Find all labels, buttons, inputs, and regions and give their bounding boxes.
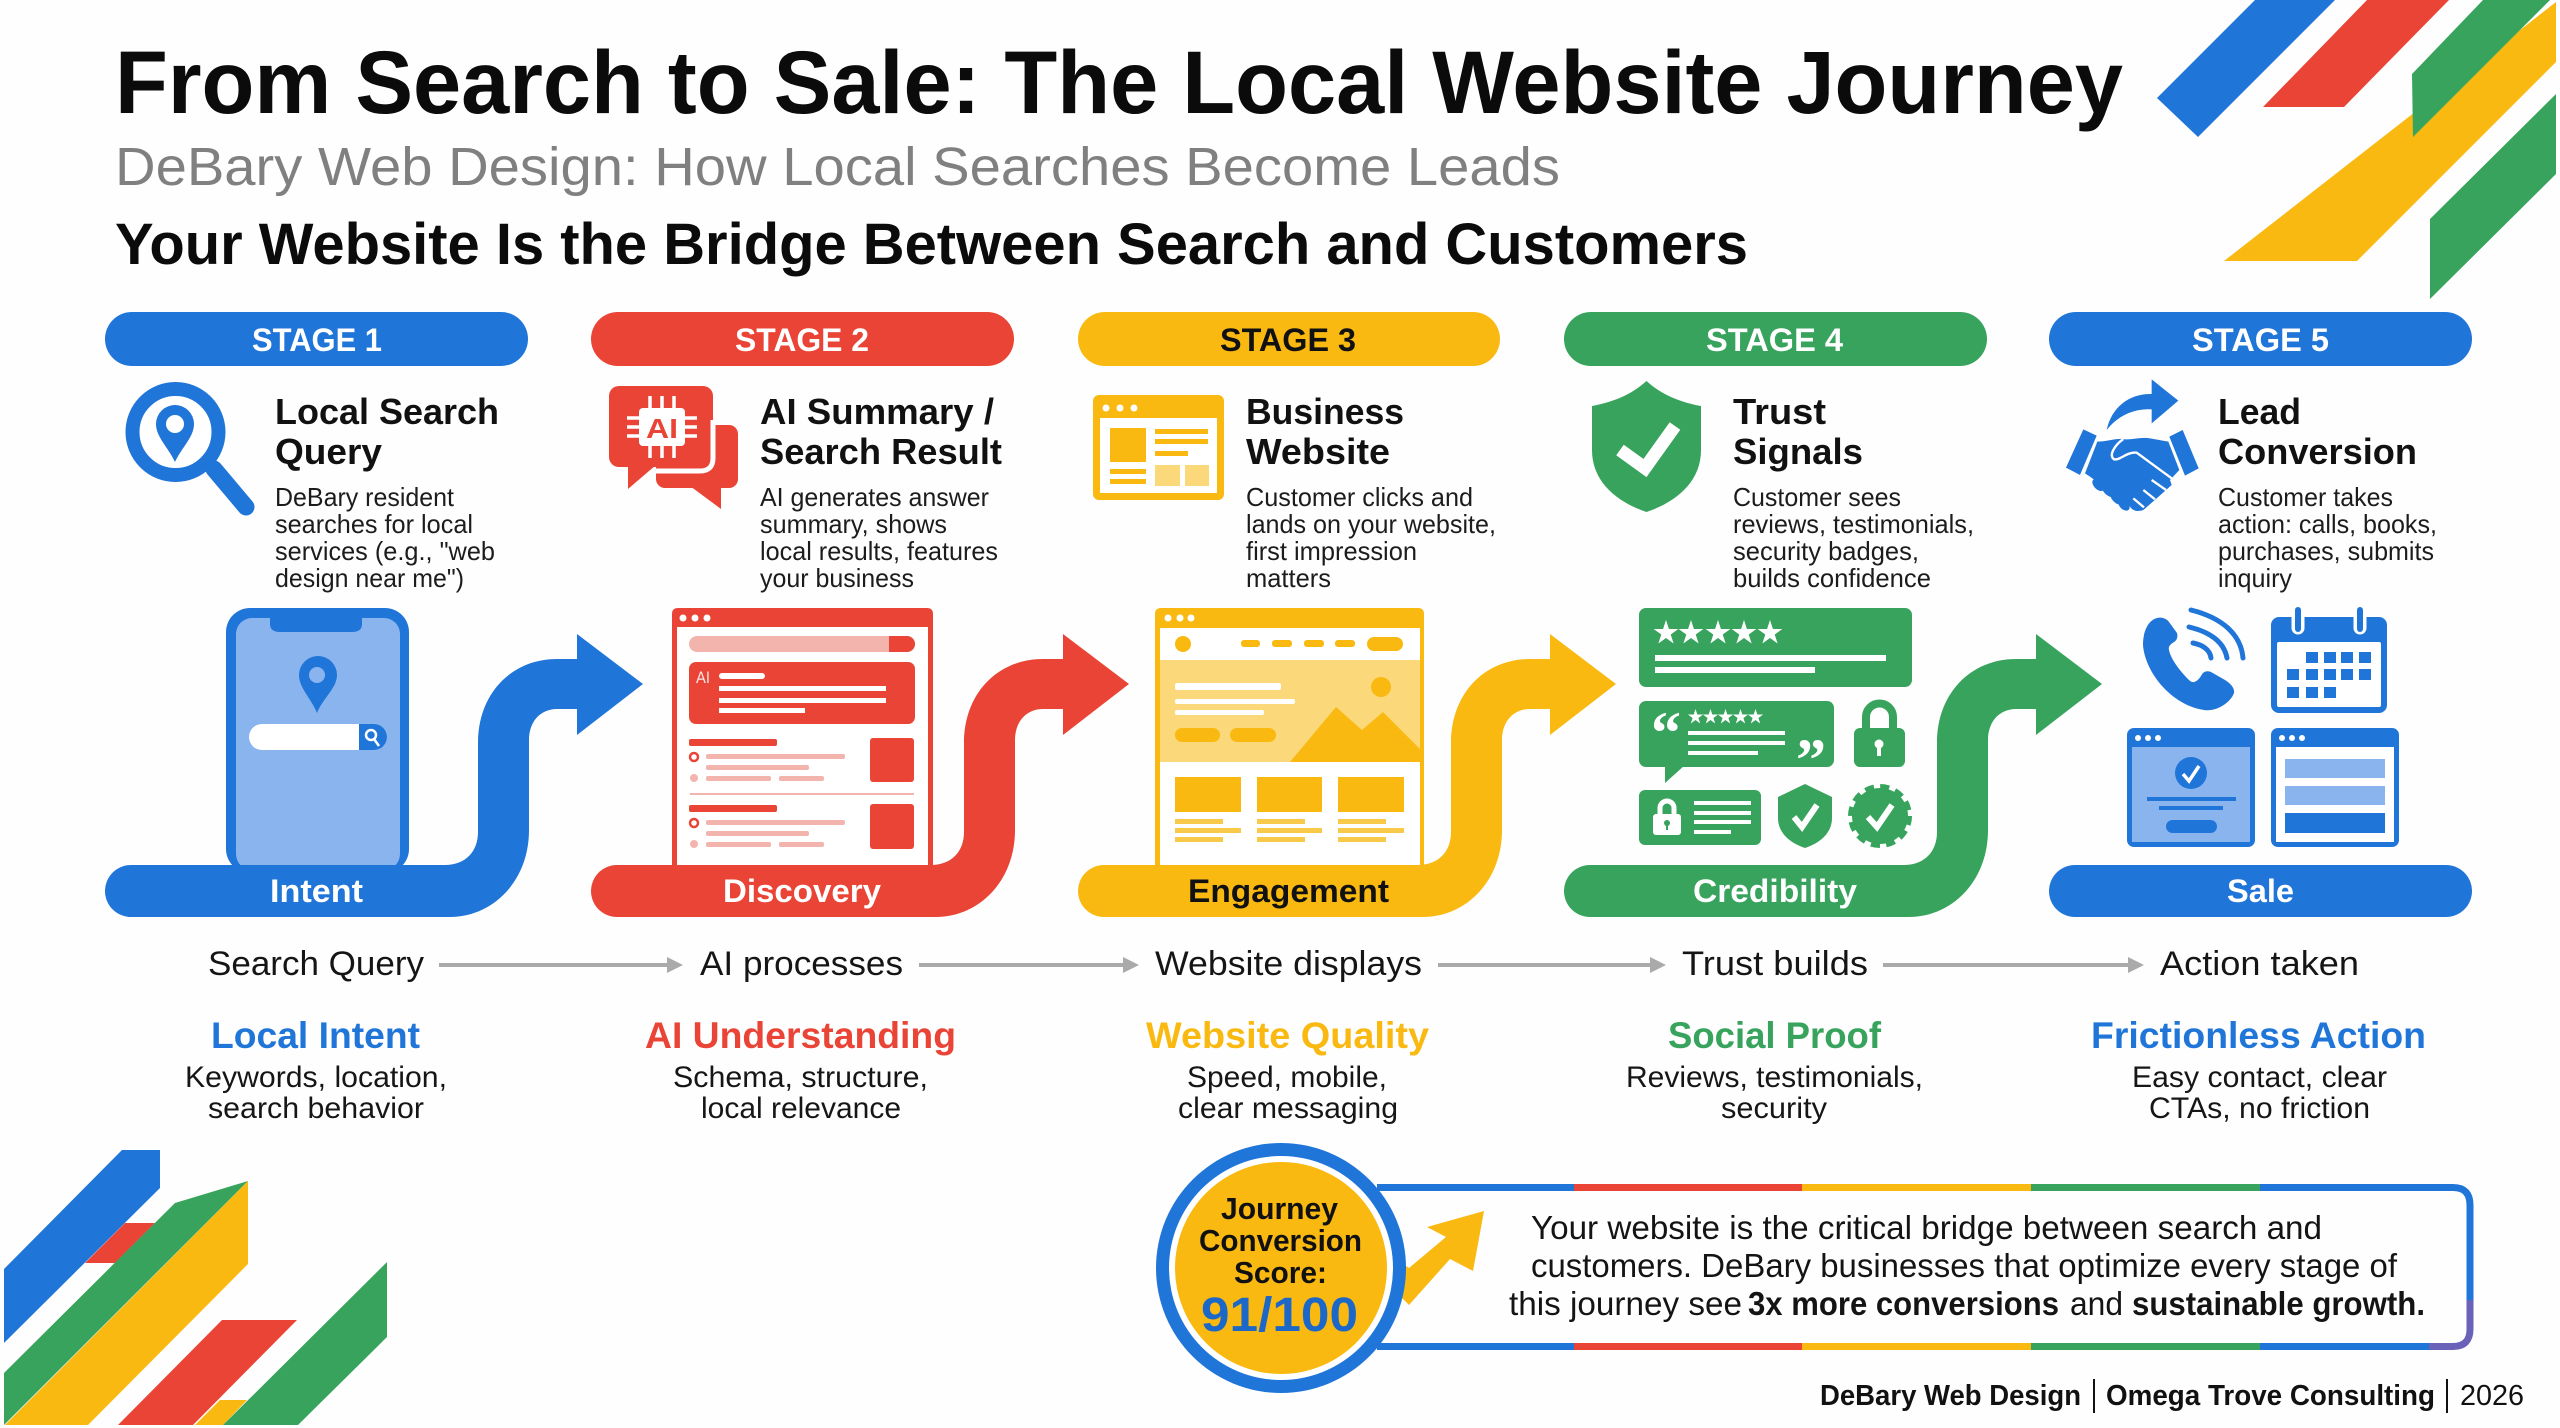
stage 2 description: [760, 482, 998, 593]
verified badge: [1851, 787, 1909, 845]
key factor detail: Keywords, location,: [185, 1061, 447, 1094]
stage 3 description: lands on your website,: [1246, 509, 1496, 539]
stage 3 heading: Website: [1246, 431, 1390, 472]
score badge: [1156, 1143, 1406, 1393]
phone call icon: [2143, 610, 2243, 710]
stage 5 heading: Lead: [2218, 391, 2301, 432]
illustration: trust signals collage: [1639, 608, 1912, 848]
panel: stage 2: [591, 312, 1129, 1125]
stage 4 heading: Trust: [1733, 391, 1826, 432]
arrow: intent to discovery: [105, 634, 643, 917]
stage 3 pill: STAGE 3: [1220, 322, 1356, 358]
footer credits: [1820, 1379, 2524, 1413]
stage 2 description: local results, features: [760, 536, 998, 566]
icon: website layout: [1093, 395, 1224, 500]
flow step: Trust builds: Trust builds: [1682, 945, 1868, 983]
flow step: AI processes: AI processes: [700, 945, 903, 983]
key factor detail: local relevance: [701, 1092, 901, 1125]
form window: [2271, 728, 2399, 847]
stage 4 description: security badges,: [1733, 536, 1919, 566]
icon: AI chat bubbles: [609, 386, 738, 509]
banner message: sustainable growth.: [2132, 1285, 2425, 1322]
stage 3 description: first impression: [1246, 536, 1417, 566]
banner message: Your website is the critical bridge between search and: [1531, 1209, 2322, 1246]
score badge: 91/100: [1201, 1289, 1358, 1342]
stage 1 heading: Local Search: [275, 391, 499, 432]
banner message: 3x more conversions: [1748, 1285, 2059, 1322]
key factor detail: CTAs, no friction: [2149, 1092, 2370, 1125]
illustration: search result page: [672, 608, 933, 870]
callout: conversion summary banner: [1156, 1143, 2470, 1393]
arrow: discovery to engagement: [591, 634, 1129, 917]
banner message: and: [2070, 1285, 2123, 1322]
stage 1 description: services (e.g., "web: [275, 536, 495, 566]
banner multicolor border: [1377, 1188, 2470, 1346]
key factor detail: [1178, 1061, 1398, 1125]
flow step: Search Query: Search Query: [208, 945, 424, 983]
testimonial bubble: [1639, 700, 1834, 793]
arrows: flow row connectors: [439, 957, 2144, 973]
flow step: Action taken: Action taken: [2160, 945, 2359, 983]
stage 1 pill: [105, 312, 528, 366]
icon: shield with check: [1592, 381, 1701, 512]
stage 2 heading: [760, 391, 1002, 472]
subtitle: DeBary Web Design: How Local Searches Become Leads: [115, 137, 1560, 197]
key factor detail: security: [1721, 1092, 1827, 1125]
stage 5 description: [2218, 482, 2437, 593]
stage 4 description: builds confidence: [1733, 563, 1931, 593]
stage 5 heading: Conversion: [2218, 431, 2417, 472]
label: Discovery: Discovery: [723, 873, 881, 909]
stage 2 description: your business: [760, 563, 914, 593]
key factor: Social Proof: Social Proof: [1668, 1015, 1882, 1056]
decoration: bottom left stripes: [4, 1150, 387, 1425]
banner message: [1509, 1209, 2425, 1322]
footer credits: 2026: [2460, 1380, 2524, 1412]
title: From Search to Sale: The Local Website Journey: [115, 32, 2123, 132]
flow step: Website displays: Website displays: [1155, 945, 1422, 983]
stage 5 description: Customer takes: [2218, 482, 2393, 512]
score badge: Conversion: [1199, 1223, 1362, 1258]
stage 1 description: [275, 482, 495, 593]
stage 4 heading: [1733, 391, 1863, 472]
review card: [1639, 608, 1912, 687]
panel: stage 3: [1078, 312, 1616, 1125]
panel: stage 5: [2049, 312, 2472, 1125]
stage 4 description: Customer sees: [1733, 482, 1901, 512]
stage 2 description: AI generates answer: [760, 482, 989, 512]
arrow: credibility to sale: [1564, 634, 2102, 917]
key factor: AI Understanding: AI Understanding: [645, 1015, 956, 1056]
testimonial bubble: “: [1651, 700, 1681, 766]
icon: magnifier with location pin: [132, 389, 246, 507]
label pill: Sale: [2049, 865, 2472, 917]
panel: stage 1: [105, 312, 643, 1125]
stage 1 description: searches for local: [275, 509, 473, 539]
key factor detail: [673, 1061, 928, 1125]
security shield: [1778, 784, 1832, 848]
key factor detail: [1626, 1061, 1923, 1125]
icon: handshake with arrow: [2066, 379, 2199, 513]
key factor: Website Quality: Website Quality: [1146, 1015, 1429, 1056]
stage 4 pill: [1564, 312, 1987, 366]
secure certificate card: [1639, 790, 1761, 845]
arrow: engagement to credibility: [1078, 634, 1616, 917]
stage 2 description: summary, shows: [760, 509, 947, 539]
stage 3 description: Customer clicks and: [1246, 482, 1473, 512]
stage 2 pill: STAGE 2: [735, 322, 869, 358]
illustration: search result page: AI: [696, 668, 710, 687]
label: Engagement: Engagement: [1188, 873, 1389, 909]
confirmation window: [2127, 728, 2255, 847]
key factor detail: clear messaging: [1178, 1092, 1398, 1125]
footer credits: Omega Trove Consulting: [2106, 1380, 2435, 1412]
stage 5 description: purchases, submits: [2218, 536, 2434, 566]
stage 3 heading: Business: [1246, 391, 1404, 432]
stage 3 description: matters: [1246, 563, 1331, 593]
panel: stage 4: [1564, 312, 2102, 1125]
key factor detail: Reviews, testimonials,: [1626, 1061, 1923, 1094]
arrow: rising yellow arrow: [1392, 1211, 1484, 1305]
stage 1 description: DeBary resident: [275, 482, 455, 512]
stage 2 heading: Search Result: [760, 431, 1002, 472]
key factor detail: [185, 1061, 447, 1125]
decoration: top right stripes: [2157, 0, 2556, 299]
padlock: [1854, 704, 1905, 767]
illustration: business website mockup: [1155, 608, 1424, 870]
key factor detail: Easy contact, clear: [2132, 1061, 2387, 1094]
illustration: smartphone search: [226, 608, 409, 873]
banner message: this journey see: [1509, 1285, 1742, 1322]
stage 4 pill: STAGE 4: [1706, 322, 1843, 358]
stage 4 description: [1733, 482, 1974, 593]
key factor detail: search behavior: [208, 1092, 424, 1125]
score badge: Journey: [1221, 1191, 1339, 1226]
key factor detail: Schema, structure,: [673, 1061, 928, 1094]
stage 3 description: [1246, 482, 1496, 593]
section heading: Your Website Is the Bridge Between Search and Customers: [115, 212, 1748, 277]
stage 2 pill: [591, 312, 1014, 366]
key factor: Frictionless Action: Frictionless Action: [2091, 1015, 2426, 1056]
stage 5 pill: STAGE 5: [2192, 322, 2329, 358]
stage 3 pill: [1078, 312, 1500, 366]
key factor detail: [2132, 1061, 2387, 1125]
testimonial bubble: ”: [1796, 727, 1826, 793]
label: Intent: Intent: [270, 873, 363, 909]
stage 5 description: inquiry: [2218, 563, 2292, 593]
stage 1 description: design near me"): [275, 563, 464, 593]
score badge: Score:: [1234, 1255, 1327, 1290]
label pill: Sale: Sale: [2227, 873, 2294, 909]
stage 4 heading: Signals: [1733, 431, 1863, 472]
calendar icon: [2271, 610, 2387, 713]
stage 4 description: reviews, testimonials,: [1733, 509, 1974, 539]
key factor detail: Speed, mobile,: [1187, 1061, 1387, 1094]
stage 3 heading: [1246, 391, 1404, 472]
label: Credibility: Credibility: [1693, 873, 1857, 909]
key factor: Local Intent: Local Intent: [211, 1015, 420, 1056]
stage 5 description: action: calls, books,: [2218, 509, 2437, 539]
illustration: conversion actions: [2127, 610, 2399, 847]
stage 2 heading: AI Summary /: [760, 391, 994, 432]
stage 5 heading: [2218, 391, 2417, 472]
banner message: customers. DeBary businesses that optimize every stage of: [1531, 1247, 2398, 1284]
icon: AI chat bubbles: AI: [646, 413, 678, 444]
stage 1 heading: Query: [275, 431, 382, 472]
stage 1 heading: [275, 391, 499, 472]
stage 5 pill: [2049, 312, 2472, 366]
footer credits: DeBary Web Design: [1820, 1380, 2081, 1412]
stage 1 pill: STAGE 1: [252, 322, 382, 358]
